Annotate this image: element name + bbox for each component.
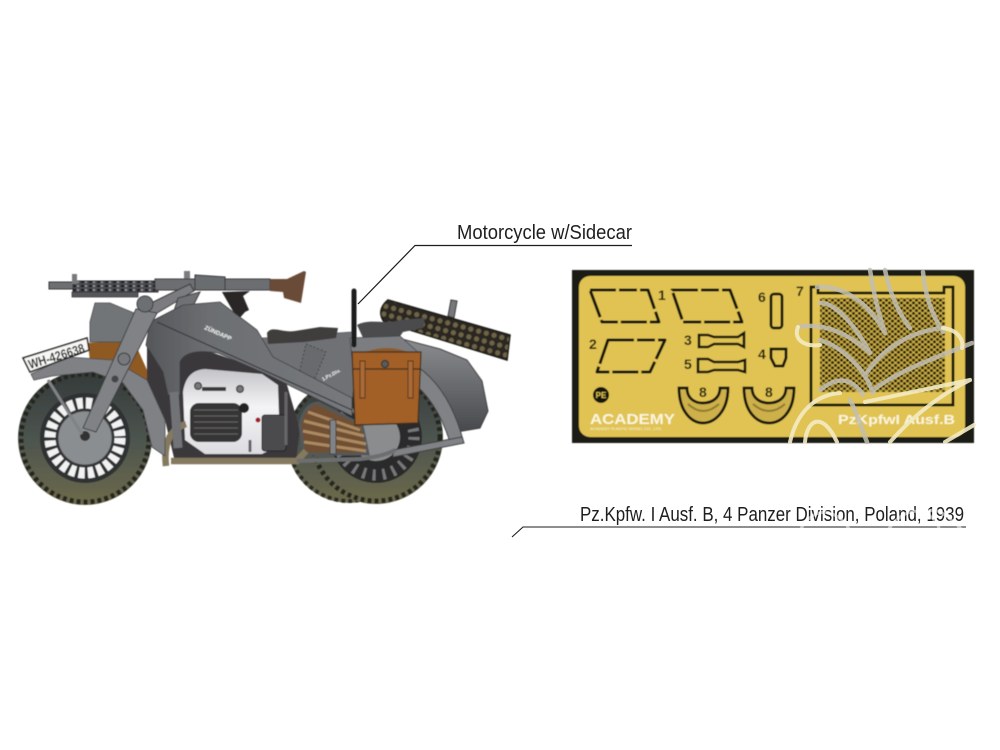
PE badge	[593, 387, 609, 403]
saddle bag	[352, 348, 421, 425]
licence plate: WH-426638	[26, 341, 86, 372]
gun butt	[270, 271, 306, 303]
leader line: motorcycle	[358, 246, 632, 304]
part numbers: 5	[684, 356, 692, 372]
sidecar body top and rear seat	[350, 318, 425, 358]
front fender	[31, 357, 165, 456]
chain case	[300, 403, 368, 454]
motorcycle with sidecar illustration	[18, 271, 510, 505]
rear wheel	[309, 370, 443, 504]
sidecar wheel	[287, 379, 411, 503]
body panel under the seat	[262, 332, 358, 400]
engine bay dark backing	[147, 345, 300, 462]
carburettor	[262, 415, 286, 451]
leader line: tank	[512, 527, 966, 537]
spare tyre	[381, 300, 510, 360]
part numbers: 8	[765, 384, 773, 400]
seat	[267, 327, 338, 344]
PE badge: PE	[596, 391, 607, 400]
parts 3 and 5 rods	[698, 333, 745, 372]
part numbers: 2	[589, 336, 597, 352]
sidecar fender	[398, 338, 488, 432]
watermark strokes	[790, 270, 974, 532]
part numbers: 1	[658, 287, 666, 303]
sheet caption: PzKpfwI Ausf.B	[838, 412, 955, 427]
part numbers: 7	[796, 283, 804, 299]
rear fender	[368, 350, 463, 442]
brown frame behind the fork	[88, 340, 147, 405]
front wheel	[18, 371, 152, 505]
Academy logo: ACADEMY	[590, 411, 675, 428]
lower frame rail	[297, 450, 395, 461]
part 7 frame	[811, 287, 953, 405]
headlight	[90, 303, 134, 342]
brass panel	[579, 276, 965, 437]
part 8 right	[744, 388, 794, 423]
seat spring	[298, 344, 326, 385]
engine block	[183, 369, 286, 454]
part numbers: 8	[699, 384, 707, 400]
photo-etched parts sheet	[572, 270, 974, 443]
cylinder head	[190, 403, 242, 442]
part numbers: 3	[684, 332, 692, 348]
front fork	[48, 296, 157, 434]
machine gun	[49, 271, 306, 320]
label: motorcycle: Motorcycle w/Sidecar	[457, 221, 632, 244]
tank brand text: ZÜNDAPP	[203, 324, 233, 343]
sidecar side bar	[393, 437, 464, 457]
parts 1 and 2 outlines	[590, 290, 742, 372]
exhaust pipe	[165, 424, 306, 466]
Academy logo: ACADEMY PLASTIC MODEL CO., LTD.	[590, 426, 662, 431]
part numbers	[589, 283, 804, 400]
parts 6 and 4	[771, 294, 786, 366]
antenna	[352, 291, 356, 345]
part 7 mesh	[820, 298, 945, 392]
fuel tank and main frame: 1.Pz.Div.	[321, 368, 342, 383]
part numbers: 4	[758, 346, 766, 362]
part 8 left	[679, 388, 728, 423]
sheet frame	[572, 270, 974, 443]
part numbers: 6	[758, 289, 766, 305]
fuel tank and main frame	[146, 302, 352, 448]
